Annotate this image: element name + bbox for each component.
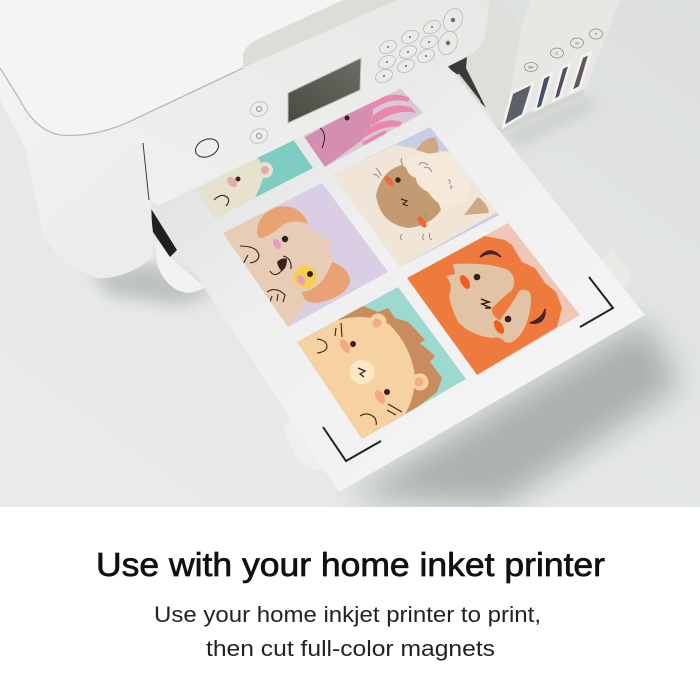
sticker: sheep: [330, 125, 502, 270]
sticker: teal bear (partly in printer): [198, 140, 313, 218]
paper shadow: [345, 320, 680, 507]
tank side face: [465, 0, 522, 133]
dog ear: [257, 206, 308, 238]
dog ear lower: [302, 262, 350, 303]
paper tab: left: [284, 420, 326, 470]
paper tray under printer: [155, 240, 205, 293]
ink labels: Y: [595, 32, 598, 36]
ink labels: BK: [528, 64, 534, 70]
photo background: desk surface: [0, 0, 700, 507]
sticker: hedgehog: [295, 285, 470, 441]
hedgehog face: [350, 360, 374, 384]
printer slot behind paper: [447, 57, 486, 108]
heading: Use with your home inket printer: [96, 546, 605, 583]
left panel buttons: [248, 99, 270, 146]
sticker: dog: [220, 180, 390, 330]
display screen: [288, 58, 361, 123]
body seam: [143, 143, 149, 200]
ink labels: M: [575, 40, 579, 46]
hedgehog ears: [370, 314, 386, 323]
crop mark: left: [323, 427, 381, 461]
caption line 2: then cut full-color magnets: [206, 636, 495, 661]
paper tray slot: [150, 207, 177, 257]
ink windows: [503, 53, 590, 127]
ink labels: C: [556, 50, 559, 56]
ink labels: [524, 29, 602, 72]
keypad glyphs: [383, 18, 455, 77]
lid handle recess: [243, 0, 397, 68]
fox ears: [480, 251, 501, 257]
sheep face: [376, 165, 441, 228]
power button: [193, 135, 221, 161]
sheep ear: [416, 137, 439, 156]
sheep ear right: [464, 197, 489, 215]
ink tank unit: [465, 0, 620, 133]
sticker: fox: [405, 220, 583, 378]
chick: [294, 266, 316, 288]
paper rail: [458, 74, 480, 102]
tank base lip: [497, 89, 585, 133]
sticker: pink zebra (partly in printer): [304, 88, 423, 167]
caption line 1: Use your home inkjet printer to print,: [154, 602, 541, 627]
crop mark: right: [580, 277, 613, 327]
lid edge line: [0, 68, 243, 135]
control panel and front band: [60, 0, 490, 205]
printer body: [0, 60, 243, 278]
dog face: [282, 236, 288, 242]
caption panel: [0, 507, 700, 700]
tank floor shadow: [503, 97, 600, 148]
printed sheet: [150, 65, 645, 492]
fox face: [446, 264, 531, 343]
keypad: [373, 5, 466, 85]
sheep wool: [406, 152, 468, 204]
printer shadow: [90, 262, 215, 305]
tank front face: [503, 0, 620, 133]
paper tab: right: [600, 246, 630, 290]
printer lid: [0, 0, 343, 135]
